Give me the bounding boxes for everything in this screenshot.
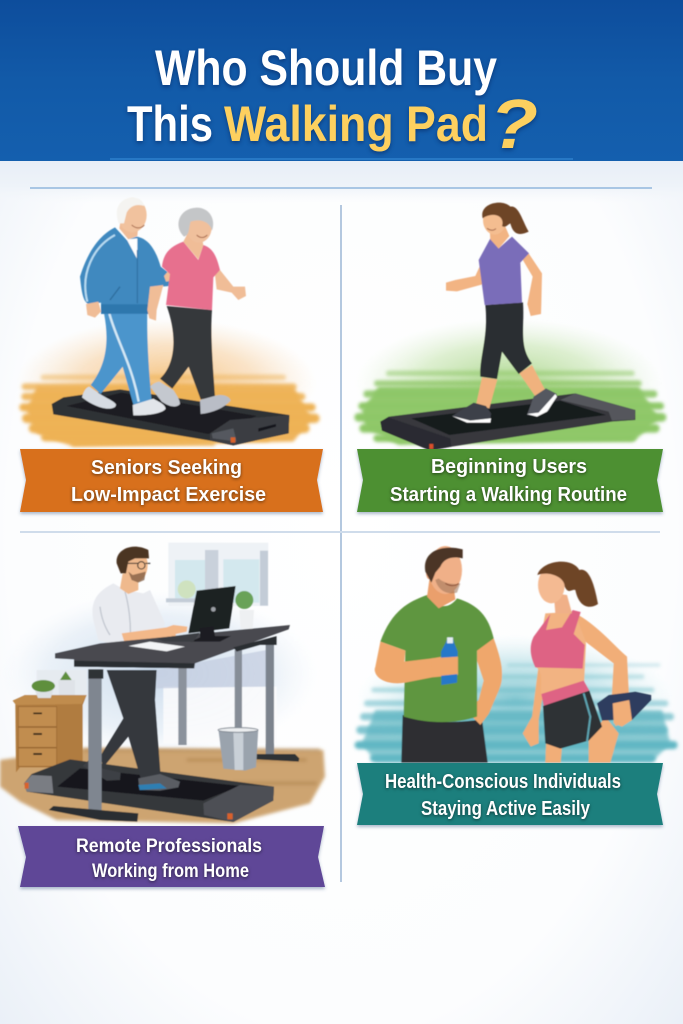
title: Who Should Buy (155, 40, 497, 96)
figure: man in blue tracksuit (80, 198, 178, 415)
ribbon text: Beginning Users (431, 456, 587, 478)
ribbon text: Working from Home (92, 861, 249, 882)
header band (0, 0, 683, 203)
title (127, 40, 538, 163)
walking pad (52, 389, 289, 445)
figure: man working at desk (83, 547, 187, 791)
ribbon text (71, 457, 266, 506)
cabinet with plants (13, 671, 87, 772)
laptop and plant (157, 586, 254, 642)
ribbon: seniors (20, 449, 323, 512)
title: This (127, 96, 213, 152)
title: ? (490, 85, 538, 163)
figure: woman stretching (523, 562, 651, 763)
walking pad (24, 759, 274, 822)
ribbon text: Remote Professionals (76, 836, 262, 857)
floor (0, 748, 325, 823)
illustration: man at standing desk on a walking pad (0, 543, 325, 823)
panel: remote professionals (0, 543, 325, 887)
illustration: woman walking on a walking pad (355, 203, 662, 451)
panel: health-conscious (355, 546, 675, 825)
panel: seniors (17, 198, 323, 512)
ribbon text: Low-Impact Exercise (71, 484, 266, 506)
ribbon text: Seniors Seeking (91, 457, 242, 479)
ribbon text (385, 771, 621, 820)
figure: woman in purple shirt (446, 203, 557, 423)
ribbon: health-conscious (357, 763, 663, 825)
ribbon text: Health-Conscious Individuals (385, 771, 621, 793)
trash can (218, 728, 258, 771)
illustration: seniors walking on a walking pad (17, 198, 317, 448)
ribbon: beginners (357, 449, 663, 512)
illustration: man with water bottle and woman stretching (355, 546, 675, 765)
window (166, 543, 268, 606)
ribbon text: Staying Active Easily (421, 798, 591, 820)
figure: senior woman in pink shirt (147, 208, 246, 414)
panel: beginners (355, 203, 663, 512)
desk legs back (178, 667, 187, 745)
figure: man in green shirt (375, 546, 502, 763)
desk top and paper (55, 625, 290, 668)
ribbon text: Starting a Walking Routine (390, 484, 627, 506)
front desk leg (49, 669, 138, 822)
walking pad (380, 393, 635, 451)
title: Walking Pad (224, 96, 488, 152)
ribbon: remote professionals (18, 826, 325, 887)
ribbon text (390, 456, 627, 506)
ribbon text (76, 836, 262, 882)
